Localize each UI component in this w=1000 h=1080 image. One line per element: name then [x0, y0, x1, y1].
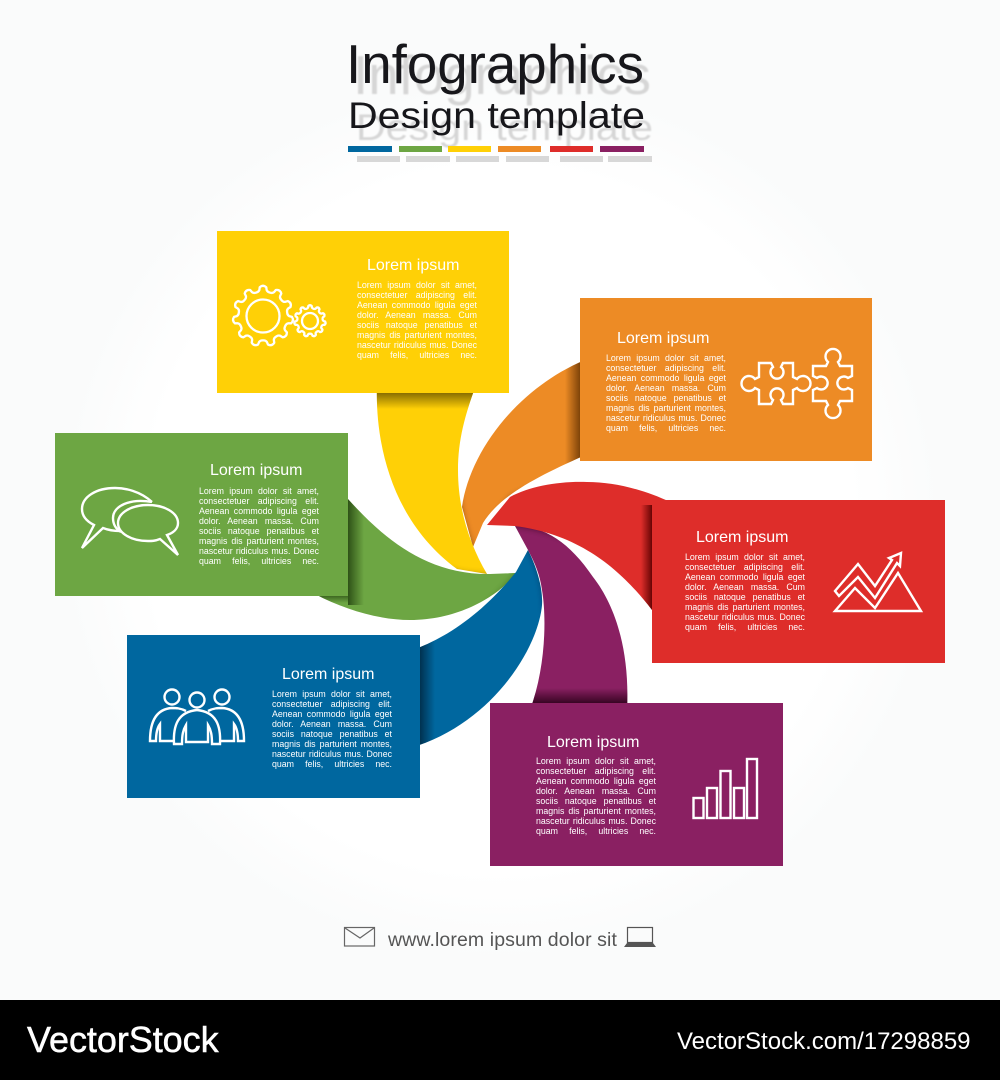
text block — [199, 486, 319, 566]
text block: Aenean commodo ligula eget — [272, 709, 392, 719]
title: Infographics — [353, 44, 651, 106]
panel: red chart — [652, 500, 945, 663]
text block: magnis dis parturient montes, — [606, 403, 726, 413]
icon: laptop — [624, 926, 656, 947]
panel: green speech — [55, 433, 348, 596]
text block: dolor. Aenean massa. Cum — [685, 582, 805, 592]
icon: envelope — [344, 926, 376, 947]
text block: nascetur ridiculus mus. Donec — [606, 413, 726, 423]
text block: Aenean commodo ligula eget — [357, 300, 477, 310]
text block: sociis natoque penatibus et — [685, 592, 805, 602]
icon: puzzle pieces — [740, 348, 854, 420]
text block: quam felis, ultricies nec. — [536, 826, 656, 836]
ribbon: yellow — [376, 393, 487, 574]
title — [346, 33, 653, 162]
heading: Lorem ipsum — [696, 529, 788, 546]
ribbon: blue — [420, 550, 542, 745]
panel: blue team — [127, 635, 420, 798]
text block: consectetuer adipiscing elit. — [685, 562, 805, 572]
text block — [272, 689, 392, 769]
text block: nascetur ridiculus mus. Donec — [536, 816, 656, 826]
icon: bar chart — [692, 758, 758, 820]
text block: nascetur ridiculus mus. Donec — [199, 546, 319, 556]
ribbon: orange — [462, 362, 580, 546]
text block — [606, 353, 726, 433]
text block: dolor. Aenean massa. Cum — [272, 719, 392, 729]
panel: purple bar chart — [490, 703, 783, 866]
text block: Lorem ipsum dolor sit amet, — [536, 756, 656, 766]
text block: magnis dis parturient montes, — [685, 602, 805, 612]
heading: Lorem ipsum — [210, 462, 302, 479]
text block: quam felis, ultricies nec. — [357, 350, 477, 360]
text block: magnis dis parturient montes, — [199, 536, 319, 546]
pinwheel ribbons — [319, 362, 666, 745]
text block: sociis natoque penatibus et — [606, 393, 726, 403]
text block: consectetuer adipiscing elit. — [357, 290, 477, 300]
text block: magnis dis parturient montes, — [536, 806, 656, 816]
panel: yellow gears — [217, 231, 509, 393]
watermark bar — [0, 1000, 1000, 1080]
text block: consectetuer adipiscing elit. — [272, 699, 392, 709]
text block: Lorem ipsum dolor sit amet, — [199, 486, 319, 496]
text block: nascetur ridiculus mus. Donec — [357, 340, 477, 350]
text block: Aenean commodo ligula eget — [536, 776, 656, 786]
text block: sociis natoque penatibus et — [199, 526, 319, 536]
title: Design template — [356, 107, 653, 148]
footer contact line — [344, 926, 656, 951]
text block: dolor. Aenean massa. Cum — [536, 786, 656, 796]
ribbon: purple — [515, 526, 628, 703]
text block: quam felis, ultricies nec. — [199, 556, 319, 566]
text block: dolor. Aenean massa. Cum — [357, 310, 477, 320]
text block: quam felis, ultricies nec. — [685, 622, 805, 632]
text block: sociis natoque penatibus et — [272, 729, 392, 739]
text block: quam felis, ultricies nec. — [272, 759, 392, 769]
text block: sociis natoque penatibus et — [357, 320, 477, 330]
text block: consectetuer adipiscing elit. — [199, 496, 319, 506]
ribbon: green — [319, 499, 516, 620]
title: Infographics — [346, 33, 644, 95]
text block: quam felis, ultricies nec. — [606, 423, 726, 433]
icon: team of people — [148, 688, 246, 746]
text block: Lorem ipsum dolor sit amet, — [685, 552, 805, 562]
text block — [685, 552, 805, 632]
ribbon: red — [487, 482, 666, 610]
text block — [357, 280, 477, 360]
text block: Lorem ipsum dolor sit amet, — [272, 689, 392, 699]
text block: nascetur ridiculus mus. Donec — [272, 749, 392, 759]
heading: Lorem ipsum — [617, 330, 709, 347]
watermark url: VectorStock.com/17298859 — [677, 1028, 971, 1055]
text block: dolor. Aenean massa. Cum — [199, 516, 319, 526]
text block: sociis natoque penatibus et — [536, 796, 656, 806]
title: Design template — [348, 95, 645, 136]
icon: growth arrow over mountains — [832, 551, 924, 612]
text block: Lorem ipsum dolor sit amet, — [357, 280, 477, 290]
icon: gears — [232, 284, 327, 346]
text block: consectetuer adipiscing elit. — [536, 766, 656, 776]
text block: nascetur ridiculus mus. Donec — [685, 612, 805, 622]
text block: magnis dis parturient montes, — [357, 330, 477, 340]
watermark logo: VectorStock — [27, 1019, 219, 1060]
heading: Lorem ipsum — [367, 257, 459, 274]
icon: speech bubbles — [80, 486, 180, 556]
text block: Aenean commodo ligula eget — [685, 572, 805, 582]
website text: www.lorem ipsum dolor sit — [388, 929, 617, 951]
text block: Aenean commodo ligula eget — [199, 506, 319, 516]
text block: dolor. Aenean massa. Cum — [606, 383, 726, 393]
heading: Lorem ipsum — [282, 666, 374, 683]
text block — [536, 756, 656, 836]
text block: magnis dis parturient montes, — [272, 739, 392, 749]
text block: Aenean commodo ligula eget — [606, 373, 726, 383]
heading: Lorem ipsum — [547, 734, 639, 751]
text block: Lorem ipsum dolor sit amet, — [606, 353, 726, 363]
text block: consectetuer adipiscing elit. — [606, 363, 726, 373]
panel: orange puzzle — [580, 298, 872, 461]
